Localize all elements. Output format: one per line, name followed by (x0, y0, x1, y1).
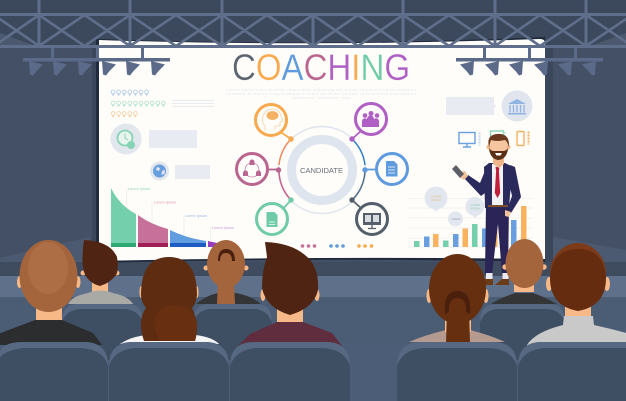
title caption text (226, 87, 417, 100)
belt (488, 205, 508, 207)
person: woman ponytail (409, 254, 505, 342)
shoes (483, 279, 509, 285)
title caption text: Lorem ipsum dolor sit amet consectetur adipiscing elit sed do eiusmod tempor incididunt (226, 87, 417, 92)
seat (397, 342, 517, 401)
icon: people network (236, 154, 268, 184)
lights left bar (23, 47, 170, 76)
lights right bar (456, 47, 603, 76)
hand in pocket (505, 210, 511, 217)
chart bubbles: IPSUM (431, 198, 441, 202)
seat (480, 304, 565, 360)
audience back row (62, 239, 565, 360)
hub outer ring (278, 126, 366, 214)
person: light shirt (527, 243, 626, 348)
person: bald right (491, 239, 557, 304)
icon: bank (502, 90, 532, 122)
callout: globe note (175, 165, 210, 179)
neck and face (493, 155, 504, 168)
hub inner ring (292, 140, 352, 200)
legs (485, 205, 509, 274)
overhead truss (0, 0, 626, 46)
hair (488, 134, 509, 147)
area chart: Lorem Ipsum (154, 200, 176, 204)
left arm (465, 166, 487, 196)
seat (0, 342, 108, 401)
colour dots row (301, 244, 373, 248)
seat (230, 342, 350, 401)
device icons (459, 131, 528, 147)
connectors (268, 131, 376, 211)
truss lights (23, 47, 603, 76)
presenter (452, 134, 521, 285)
icon: document green (256, 204, 288, 234)
icon: team group (356, 104, 386, 134)
bulb rating rows (111, 90, 214, 117)
icon: monitor (356, 204, 388, 234)
shirt (492, 164, 503, 205)
title caption text: ullamco laboris nisi (291, 95, 351, 100)
chart bubbles (424, 186, 484, 226)
seat (62, 304, 143, 360)
seat (193, 304, 272, 360)
title caption text: ut labore et dolore magna aliqua ut enim ad minim veniam quis nostrud exercitation (226, 91, 416, 96)
socks (486, 273, 508, 279)
right arm (507, 165, 521, 213)
chart bubbles: LOREM (431, 194, 442, 198)
phone hand (459, 171, 468, 180)
diagram: candidate hub (236, 104, 408, 234)
person: bun hair (196, 240, 261, 304)
icon: clock (110, 124, 142, 154)
icon: globe (150, 162, 169, 180)
area chart: Lorem Ipsum (128, 187, 150, 191)
projection screen (96, 37, 545, 263)
person: dark swept hair (237, 242, 343, 347)
seat (518, 342, 626, 401)
area chart (111, 187, 234, 247)
chart bubbles: IPSUM (471, 206, 480, 210)
bar chart (408, 198, 533, 247)
jacket body (484, 163, 513, 208)
beard (489, 148, 508, 160)
person: short dark hair (68, 240, 133, 304)
title: COACHING: COACHING (232, 47, 410, 88)
person: woman with long hair (120, 257, 219, 344)
seat (109, 342, 229, 401)
callout: clock note (149, 130, 197, 148)
icon: document blue (376, 154, 408, 184)
callout: bank note (446, 97, 496, 115)
area chart: Lorem Ipsum (185, 214, 207, 218)
icon: head with brain (256, 104, 286, 136)
person: brown bald (0, 240, 102, 345)
chart bubbles: LOREM (451, 218, 460, 221)
coloured arcs (279, 139, 365, 200)
tie (495, 167, 500, 198)
area chart: Lorem Ipsum (212, 226, 234, 230)
chart bubbles: LOREM (470, 203, 481, 207)
hub label: CANDIDATE (300, 166, 343, 175)
audience front row (0, 240, 626, 401)
